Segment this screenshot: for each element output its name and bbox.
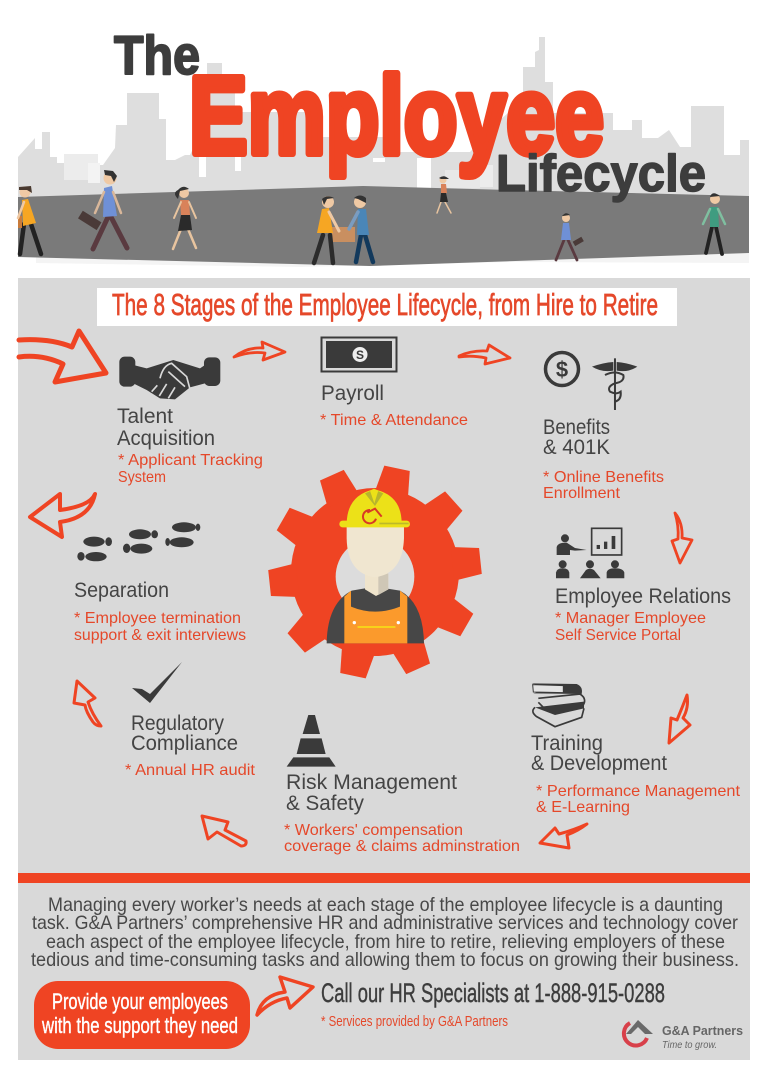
worker [327,489,424,643]
arrow: to payroll [234,342,285,360]
detail line 2: & E-Learning [536,799,630,816]
logo: G&A Partners: G&A Partners [662,1023,743,1038]
heading: Employee Relations [555,585,731,608]
person: left edge, orange vest [18,186,41,254]
detail line 2: System [118,469,166,486]
ground [36,250,749,267]
icon: banknote [322,338,396,372]
arrow: to employee relations [672,513,692,563]
people: two colleagues carrying a box [314,196,373,263]
arrow: to regulatory compliance [202,816,246,846]
detail: * Annual HR audit [125,762,256,779]
stage: payroll [320,338,468,429]
icon: traffic cone [287,715,336,767]
body paragraph [31,894,739,971]
stage: talent acquisition [117,357,263,486]
line 1: Managing every worker’s needs at each stage of the employee lifecycle is a daunting [48,894,723,916]
orange divider bar [18,873,750,883]
icon: banknote: S [356,348,364,362]
detail: * Manager Employee [555,610,706,627]
title: Employee: Employee [189,54,604,178]
callout pill: Provide your employees [52,989,228,1014]
icon: presentation [556,528,624,578]
icon: footprints [77,522,200,561]
arrow: to training [669,695,690,743]
arrow: to phone number [257,977,313,1015]
heading: Separation [74,579,169,602]
person: man in green shirt [703,193,725,254]
heading: Talent [117,405,173,428]
services note: * Services provided by G&A Partners [321,1013,508,1030]
detail: * Performance Management [536,783,741,800]
arrow: to benefits [459,345,510,364]
detail: * Online Benefits [543,469,664,486]
person: woman in skirt [173,187,196,249]
detail line 2: Self Service Portal [555,627,681,644]
panel: stages background [18,278,750,873]
icon: dollar coin: $ [556,357,568,382]
title: Lifecycle: Lifecycle [496,145,706,203]
line 3: each aspect of the employee lifecycle, from hire to retire, relieving employers of these [46,931,725,953]
heading line 2: Compliance [131,732,238,755]
stage: employee relations [555,528,731,644]
detail line 2: support & exit interviews [74,627,246,644]
heading: Regulatory [131,712,224,735]
stage: training and development [531,683,741,816]
heading line 2: & Safety [286,792,364,815]
stage: risk management and safety [284,715,520,855]
panel: footer background [18,883,750,1060]
heading line 2: Acquisition [117,427,215,450]
icon: books [532,683,585,727]
title: The: The [114,24,200,86]
arrow: back around from separation [30,494,95,537]
detail: * Workers' compensation [284,822,463,839]
detail line 2: Enrollment [543,485,621,502]
person: man with small briefcase [556,213,584,260]
detail: * Applicant Tracking [118,452,263,469]
gear [268,465,482,679]
stage: regulatory compliance [125,662,256,779]
logo: G&A Partners: Time to grow. [662,1040,717,1051]
heading: Payroll [321,382,384,405]
central illustration: worker in gear [268,465,482,679]
icon: check mark [132,662,182,703]
heading: Risk Management [286,771,457,794]
stage: benefits and 401k [543,352,664,502]
icon: dollar coin [546,352,578,386]
detail: * Employee termination [74,610,241,627]
heading: Benefits [543,416,610,439]
city skyline [18,37,749,200]
heading line 2: & Development [531,752,667,775]
detail: * Time & Attendance [320,412,468,429]
arrow: to separation [74,681,101,726]
stage: separation [74,522,246,644]
heading: Training [531,732,603,755]
icon: caduceus [592,358,637,410]
header illustration: city and walkers [18,37,749,267]
heading line 2: & 401K [543,436,610,459]
person: distant woman [437,176,451,213]
detail line 2: coverage & claims adminstration [284,838,520,855]
callout pill [34,981,250,1049]
icon: handshake [119,357,220,399]
arrow: entry into talent acquisition [19,331,106,382]
person: man with briefcase [78,170,127,249]
arrow: to risk management [540,824,587,848]
logo: G&A Partners [624,1020,743,1051]
callout pill: with the support they need [41,1013,238,1038]
